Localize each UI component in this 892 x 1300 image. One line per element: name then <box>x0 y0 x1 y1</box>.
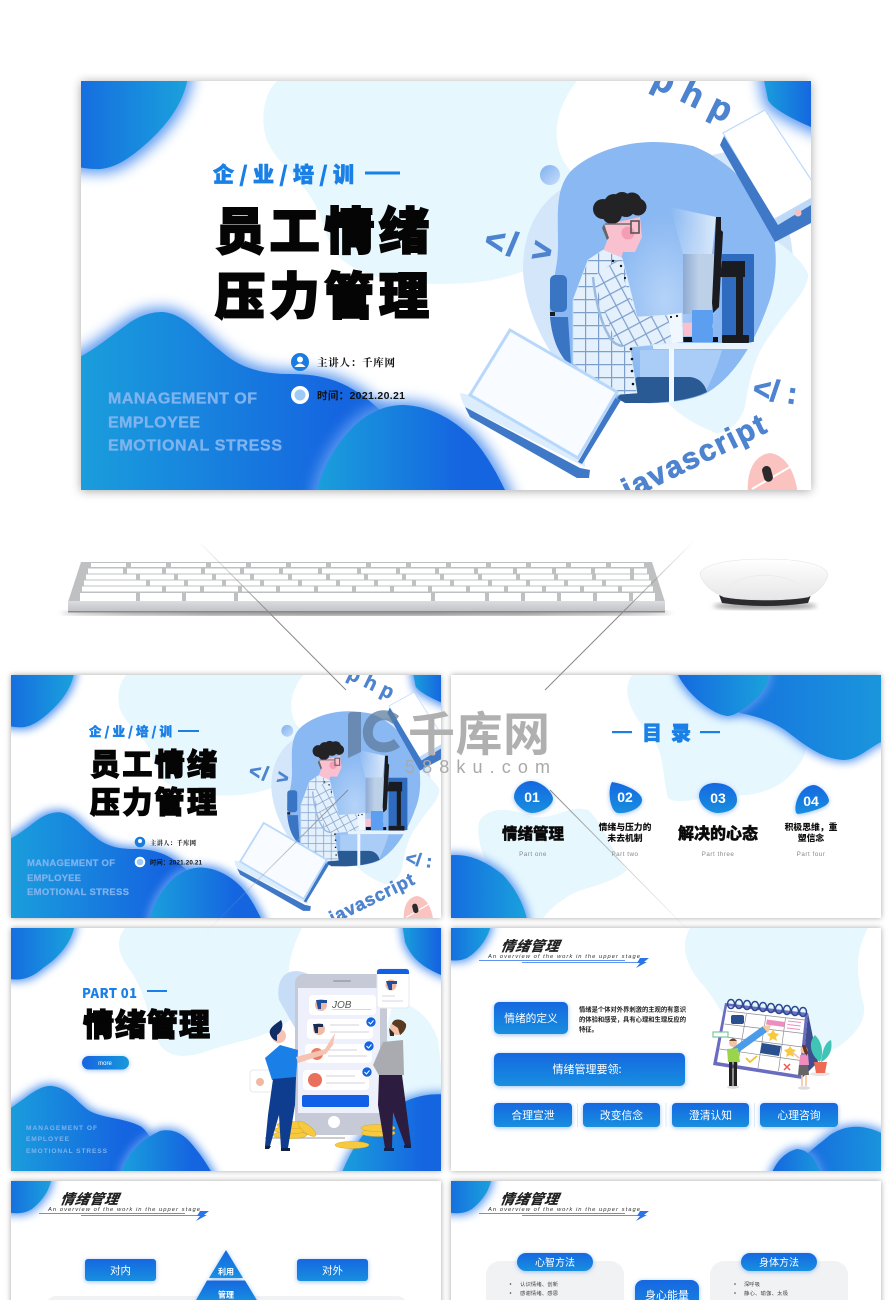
item 03: 解决的心态 <box>678 820 758 844</box>
four method buttons <box>494 1103 838 1127</box>
four method buttons: 澄清认知 <box>689 1108 732 1122</box>
item 01 <box>502 781 564 858</box>
panel: inner and outer pyramid slide <box>5 1176 441 1300</box>
pyramid slide header: 情绪管理 <box>59 1189 123 1209</box>
watermark: 千库网 588ku.com: 588ku.com <box>405 757 550 777</box>
four method buttons: 心理咨询 <box>777 1108 821 1122</box>
panel: part 01 slide <box>5 923 450 1178</box>
item 04: Part four <box>797 851 825 858</box>
contents background blobs <box>445 665 890 925</box>
four method buttons: 合理宣泄 <box>511 1108 555 1122</box>
methods slide corner blob <box>445 1176 492 1213</box>
item 02: 情绪与压力的 <box>599 820 652 833</box>
definition text: 情绪是个体对外界刺激的主观的有意识 <box>579 1004 687 1014</box>
connector line: thumbnail slide <box>203 790 348 935</box>
button: 对外 <box>297 1259 368 1281</box>
header: 情绪管理 <box>479 936 649 968</box>
panel: 心智方法: 认识情绪、创新 <box>520 1280 559 1288</box>
cover artwork: blobs and office worker illustration: </ > <box>481 221 556 272</box>
thumbnail english caption: MANAGEMENT OF <box>27 858 115 869</box>
pyramid slide corner blob <box>5 1176 52 1213</box>
more button: more <box>98 1061 112 1067</box>
pyramid slide header <box>39 1189 209 1221</box>
grey base panel <box>46 1296 407 1300</box>
english caption <box>108 390 282 454</box>
pyramid <box>195 1250 258 1300</box>
title <box>215 204 429 325</box>
item 02: 02 <box>617 789 633 805</box>
subtitle: 企业培训: 企/业/培/训 <box>213 159 354 189</box>
item 04 <box>785 785 838 858</box>
button: 对外: 对外 <box>322 1263 343 1278</box>
thumbnail subtitle: 企/业/培/训 <box>89 721 172 740</box>
cover artwork: blobs and office worker illustration: php <box>646 59 739 130</box>
button: 情绪的定义: 情绪的定义 <box>504 1011 558 1026</box>
panel: contents slide <box>445 665 890 925</box>
methods slide header: 情绪管理 <box>499 1189 563 1209</box>
button: 情绪管理要领 <box>494 1053 685 1086</box>
panel: main cover slide <box>70 59 830 507</box>
thumbnail presenter: 主讲人：千库网 <box>150 838 196 847</box>
thumbnail english caption: EMOTIONAL STRESS <box>27 887 129 898</box>
four method buttons: 改变信念 <box>600 1108 643 1122</box>
item 03 <box>678 783 758 858</box>
methods slide header <box>479 1189 649 1221</box>
part 01 background blobs <box>5 923 450 1178</box>
part label: PART 01 <box>82 983 137 1002</box>
panel: 心智方法 <box>486 1253 624 1300</box>
panel: 心智方法: 感谢情绪、感恩 <box>520 1289 558 1297</box>
part 01 english caption: EMOTIONAL STRESS <box>26 1148 108 1155</box>
mouse <box>700 559 828 610</box>
contents heading: 目录 <box>642 717 691 746</box>
item 01: 情绪管理 <box>502 822 564 844</box>
button: 情绪的定义 <box>494 1002 568 1034</box>
definition text: 的体验和感受，具有心理和生理反应的 <box>579 1014 686 1024</box>
title: 员工情绪 <box>215 204 429 260</box>
item 04: 04 <box>803 793 819 809</box>
thumbnail presenter <box>135 837 202 867</box>
item 04: 积极思维，重 <box>785 820 838 833</box>
english caption: EMOTIONAL STRESS <box>108 438 282 454</box>
date info <box>291 386 405 404</box>
date info: 时间：2021.20.21 <box>317 389 405 402</box>
definition text: 特征。 <box>579 1024 598 1034</box>
english caption: EMPLOYEE <box>108 414 200 432</box>
panel: 心智方法: 心智方法 <box>535 1254 575 1269</box>
illustration: recruiting phone with two people: JOB <box>331 1000 352 1011</box>
cover artwork: blobs and office worker illustration <box>81 81 811 490</box>
button: 对内: 对内 <box>110 1263 131 1278</box>
header: 情绪管理: 情绪管理 <box>499 936 564 956</box>
thumbnail english caption <box>27 858 129 898</box>
definition text <box>579 1004 687 1034</box>
connector line: keyboard to right thumbnail <box>545 540 695 690</box>
item 02: Part two <box>611 851 639 858</box>
connector line: contents slide <box>550 790 693 935</box>
button: 身心能量 <box>635 1280 699 1300</box>
english caption: MANAGEMENT OF <box>108 390 257 408</box>
panel: emotion management definition slide <box>445 923 890 1178</box>
part label <box>82 983 167 1002</box>
part 01 english caption <box>26 1125 108 1155</box>
thumbnail artwork: javascript <box>325 869 417 928</box>
item 01: 01 <box>524 789 540 805</box>
thumbnail title <box>90 749 217 820</box>
thumbnail artwork: </ : <box>404 848 433 872</box>
presenter info <box>291 353 395 371</box>
connector line: keyboard to left thumbnail <box>197 540 346 690</box>
item 02: 未去机制 <box>607 831 643 844</box>
watermark: 千库网 588ku.com: 千库网 <box>408 696 550 765</box>
illustration: calendar with two people and plant <box>713 1000 832 1090</box>
title: 压力管理 <box>215 269 429 325</box>
contents heading <box>612 717 720 746</box>
thumbnail title: 压力管理 <box>90 786 217 820</box>
methods slide header: An overview of the work in the upper stage <box>487 1207 641 1213</box>
header: 情绪管理: An overview of the work in the upper stage <box>487 954 641 960</box>
thumbnail artwork: </ > <box>247 760 291 790</box>
panel: 身体方法 <box>710 1253 848 1300</box>
presenter info: 主讲人：千库网 <box>317 356 395 369</box>
thumbnail artwork: php <box>344 663 397 704</box>
thumbnail presenter: 时间：2021.20.21 <box>150 858 202 866</box>
panel: 身体方法: 深呼吸 <box>744 1280 761 1288</box>
keyboard <box>61 562 671 616</box>
thumbnail english caption: EMPLOYEE <box>27 873 81 884</box>
definition slide background blobs <box>445 923 890 1178</box>
item 01: Part one <box>519 851 547 858</box>
section title: 情绪管理 <box>83 1000 210 1045</box>
button: 情绪管理要领: 情绪管理要领: <box>552 1061 622 1077</box>
cover artwork: blobs and office worker illustration: </ : <box>751 372 799 411</box>
button: 对内 <box>85 1259 156 1281</box>
cover artwork: blobs and office worker illustration: javascript <box>616 408 771 507</box>
illustration: recruiting phone with two people <box>250 969 411 1151</box>
thumbnail title: 员工情绪 <box>90 749 217 782</box>
panel: mind and body methods slide <box>445 1176 881 1300</box>
item 03: Part three <box>702 851 734 858</box>
thumbnail artwork <box>5 663 452 928</box>
panel: 身体方法: 静心、瑜伽、太极 <box>744 1289 789 1297</box>
item 04: 塑信念 <box>798 831 824 844</box>
more button <box>82 1056 129 1070</box>
panel: cover thumbnail slide <box>5 663 452 928</box>
pyramid: 利用 <box>218 1266 234 1278</box>
pyramid slide header: An overview of the work in the upper stage <box>47 1207 201 1213</box>
watermark: 千库网 588ku.com <box>348 696 550 777</box>
item 02 <box>599 782 652 858</box>
item 03: 03 <box>710 790 726 806</box>
part 01 english caption: MANAGEMENT OF <box>26 1125 97 1132</box>
panel: 身体方法: 身体方法 <box>759 1254 799 1269</box>
part 01 english caption: EMPLOYEE <box>26 1136 70 1143</box>
